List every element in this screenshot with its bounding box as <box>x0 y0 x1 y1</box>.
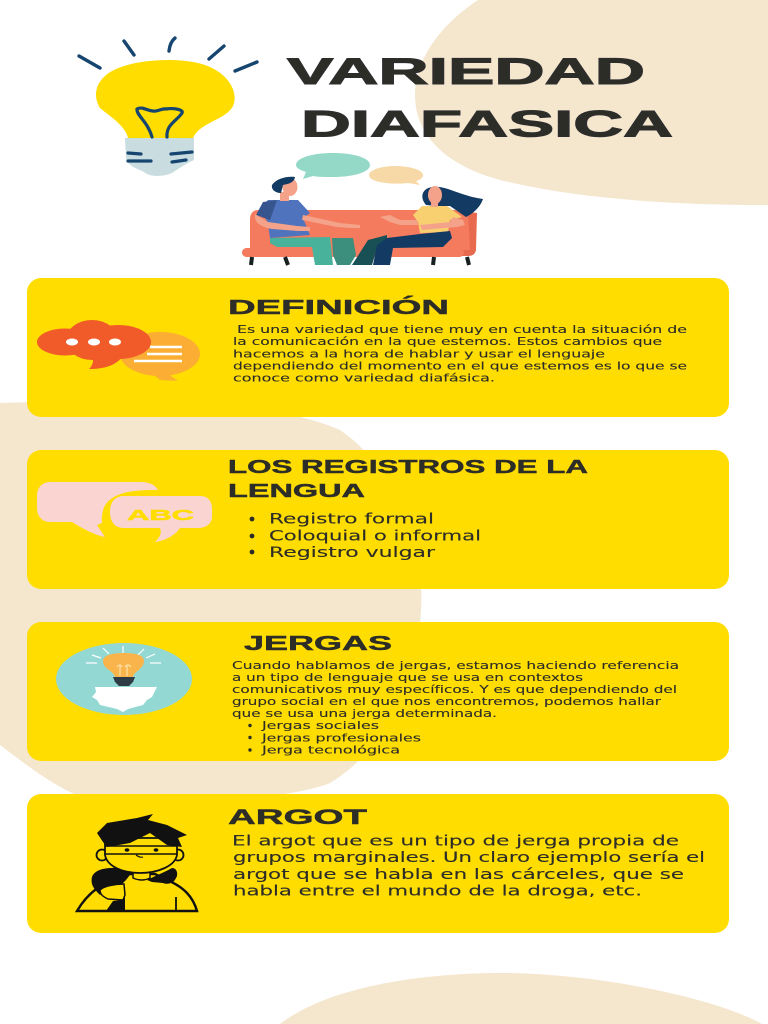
heading: registros: LENGUA <box>228 480 365 501</box>
icon: chat bubbles <box>37 320 200 381</box>
list: jergas: Jergas profesionales <box>260 732 421 744</box>
text: definición body: Es una variedad que tiene muy en cuenta la situación de <box>237 324 687 336</box>
text: argot body: grupos marginales. Un claro ejemplo sería el <box>233 850 705 866</box>
icon: light bulb <box>79 38 257 176</box>
panel: jergas <box>27 622 729 761</box>
illustration: two people talking on a sofa <box>242 153 483 265</box>
man <box>332 238 356 265</box>
heading: registros: LOS REGISTROS DE LA <box>228 456 588 477</box>
heading: registros <box>228 456 588 501</box>
list: registros: Coloquial o informal <box>269 528 481 544</box>
list: jergas: Jergas sociales <box>260 720 379 732</box>
list: registros: Registro vulgar <box>269 545 435 561</box>
list: jergas <box>248 720 421 756</box>
icon: ABC speech bubbles <box>37 482 212 542</box>
text: definición body <box>233 324 687 384</box>
panel: los registros de la lengua <box>27 450 729 589</box>
heading: jergas: JERGAS <box>244 633 392 655</box>
text: definición body: la comunicación en la que estemos. Estos cambios que <box>233 336 662 348</box>
list: registros: Registro formal <box>269 512 434 528</box>
title: VARIEDAD <box>287 51 645 92</box>
text: argot body: El argot que es un tipo de jerga propia de <box>232 834 679 850</box>
text: argot body: habla entre el mundo de la droga, etc. <box>233 884 642 900</box>
text: jergas body: grupo social en el que nos encontremos, podemos hallar <box>232 696 662 708</box>
text: definición body: dependiendo del momento en el que estemos es lo que se <box>233 360 687 372</box>
icon: ABC speech bubbles: ABC <box>127 507 194 524</box>
icon: head with light bulb <box>56 643 192 715</box>
icon: person with mask <box>77 814 197 911</box>
text: argot body <box>232 834 705 900</box>
list: jergas: Jerga tecnológica <box>260 744 400 756</box>
text: jergas body: comunicativos muy específicos. Y es que dependiendo del <box>232 684 677 696</box>
heading: argot: ARGOT <box>228 806 367 829</box>
text: jergas body: a un tipo de lenguaje que se usa en contextos <box>232 672 583 684</box>
text: jergas body <box>232 660 679 720</box>
icon: orange speech bubble <box>369 166 423 185</box>
text: argot body: argot que se habla en las cárceles, que se <box>233 867 684 883</box>
text: definición body: conoce como variedad diafásica. <box>233 372 495 384</box>
title: DIAFASICA <box>301 104 673 144</box>
panel: definición <box>27 278 729 417</box>
icon: teal speech bubble <box>296 153 370 179</box>
title <box>287 51 673 144</box>
heading: definición: DEFINICIÓN <box>228 295 449 319</box>
text: jergas body: que se usa una jerga determinada. <box>232 708 497 720</box>
text: jergas body: Cuando hablamos de jergas, estamos haciendo referencia <box>232 660 679 672</box>
woman <box>422 187 483 217</box>
list: registros <box>250 512 481 561</box>
text: definición body: hacemos a la hora de hablar y usar el lenguaje <box>233 348 605 360</box>
panel: argot <box>27 794 729 933</box>
